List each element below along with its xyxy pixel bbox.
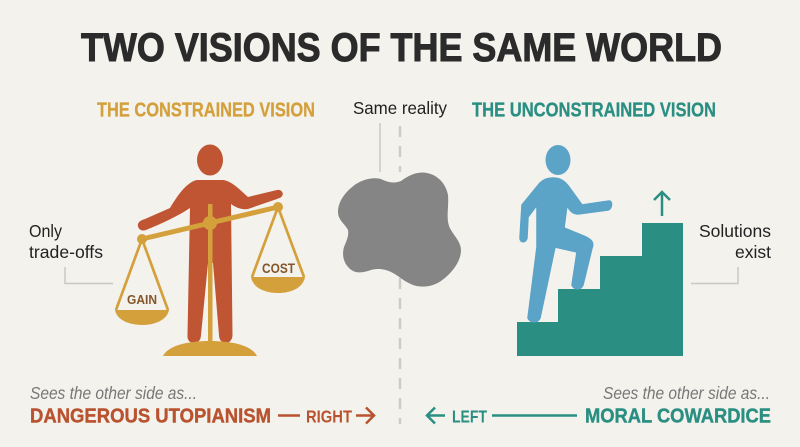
right verdict: moral cowardice: MORAL COWARDICE [585,405,771,428]
icon: left pan with gain: GAIN [127,292,157,307]
arrow: left [427,407,577,427]
leader line: only trade-offs [65,267,113,284]
label: only trade-offs [29,221,103,262]
arrow: left: LEFT [452,407,487,427]
reality blob [338,173,461,287]
icon: right pan with cost: COST [262,260,295,276]
arrow: right [278,407,374,427]
label: solutions exist: exist [735,242,771,262]
label: only trade-offs: Only [29,221,62,241]
icon: up arrow [654,192,670,216]
icon: person climbing [520,145,612,322]
icon: left pan with gain [115,239,169,325]
left verdict: dangerous utopianism: DANGEROUS UTOPIANISM [30,405,271,428]
heading: constrained vision: THE CONSTRAINED VISION [97,100,315,122]
icon: right pan with cost [251,207,305,293]
icon: scale post and base [163,204,257,356]
label: only trade-offs: trade-offs [29,242,103,262]
figure: man holding scales [115,144,305,356]
heading: unconstrained vision: THE UNCONSTRAINED VISION [472,100,716,122]
leader line: same reality [379,123,381,172]
label: solutions exist: Solutions [699,221,771,241]
icon: scale beam [137,202,283,244]
title: TWO VISIONS OF THE SAME WORLD [81,26,722,70]
icon: staircase [517,223,683,356]
right caption: Sees the other side as... [603,383,770,403]
centre dashed divider [399,126,401,424]
leader line: solutions exist [691,267,738,284]
label: same reality: Same reality [353,98,447,118]
icon: man body [138,144,283,343]
label: solutions exist [699,221,771,262]
arrow: right: RIGHT [306,407,352,427]
left caption: Sees the other side as... [30,383,197,403]
